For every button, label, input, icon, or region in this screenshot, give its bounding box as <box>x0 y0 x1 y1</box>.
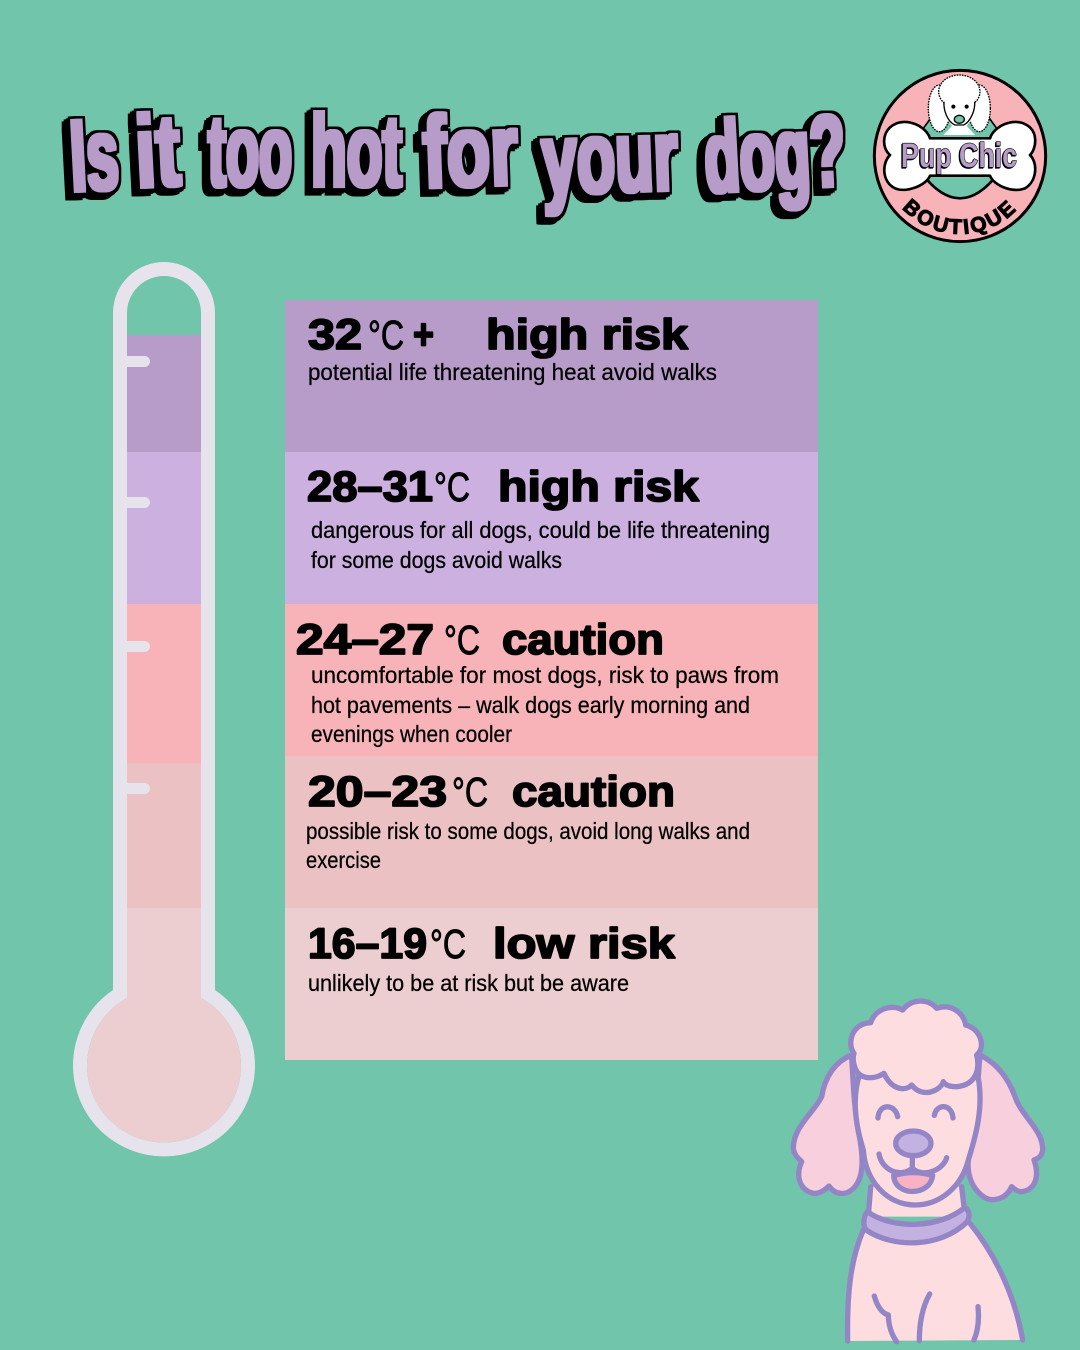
title: for <box>421 92 520 210</box>
panel: 28-31C high risk: high risk <box>498 463 699 511</box>
dog face <box>855 1057 980 1205</box>
thermometer level: 28-31C <box>127 452 201 604</box>
panel: 16-19C low risk: °C <box>430 921 466 967</box>
logo: Pup Chic Boutique badge <box>872 68 1048 244</box>
panel: 24-27C caution: hot pavements – walk dogs early morning and <box>311 692 750 718</box>
panel: 32C+ high risk: + <box>413 311 434 359</box>
panel: 24-27C caution: 24–27 <box>296 616 434 664</box>
title: too <box>208 94 292 208</box>
illustration: smiling poodle <box>793 1001 1043 1342</box>
panel: 24-27C caution: uncomfortable for most dogs, risk to paws from <box>311 662 779 688</box>
thermometer <box>73 262 255 1156</box>
panel: 20-23C caution: °C <box>452 769 488 815</box>
panel: 20-23C caution: exercise <box>306 847 381 873</box>
thermometer level: 20-23C <box>127 763 201 908</box>
panel: 32C+ high risk <box>285 300 818 452</box>
dog legs <box>874 1294 979 1342</box>
panel: 20-23C caution: caution <box>512 768 675 816</box>
dog body <box>848 1223 1023 1341</box>
thermometer tick marks <box>120 356 150 794</box>
title: Is <box>67 97 121 213</box>
title: dog? <box>701 93 848 215</box>
panel: 28-31C high risk: for some dogs avoid walks <box>311 547 562 573</box>
dog neck <box>867 1187 965 1217</box>
logo: Pup Chic Boutique badge: BOUTIQUE <box>902 198 1017 235</box>
panel: 24-27C caution: caution <box>502 616 664 664</box>
panel: 24-27C caution <box>285 604 818 756</box>
panel: 32C+ high risk: potential life threatening heat avoid walks <box>308 359 717 385</box>
dog collar <box>864 1207 969 1243</box>
title: it <box>132 93 183 209</box>
panel: 16-19C low risk: unlikely to be at risk but be aware <box>308 970 629 996</box>
panel: 28-31C high risk: dangerous for all dogs, could be life threatening <box>311 517 770 543</box>
panel: 28-31C high risk: °C <box>434 464 470 510</box>
panel: 32C+ high risk: 32 <box>308 311 362 359</box>
panel: 28-31C high risk <box>285 452 818 604</box>
thermometer level: 32C+ <box>127 335 201 452</box>
panel: 16-19C low risk: low risk <box>493 920 675 968</box>
logo poodle <box>928 75 990 135</box>
thermometer level: 24-27C <box>127 604 201 763</box>
dog right ear <box>968 1055 1043 1200</box>
title: hot <box>311 94 402 208</box>
panel: 20-23C caution <box>285 756 818 908</box>
dog left ear <box>793 1055 862 1193</box>
panel: 16-19C low risk <box>285 908 818 1060</box>
panel: 32C+ high risk: high risk <box>486 311 688 359</box>
panel: 24-27C caution: °C <box>444 617 480 663</box>
panel: 20-23C caution: possible risk to some dogs, avoid long walks and <box>306 818 750 844</box>
dog eyes <box>878 1107 953 1118</box>
thermometer level: 16-19C and bulb <box>87 908 241 1143</box>
logo bone <box>884 122 1035 190</box>
title: your <box>540 98 680 216</box>
panel: 20-23C caution: 20–23 <box>308 768 447 816</box>
dog head fluff <box>851 1001 981 1092</box>
panel: 32C+ high risk: °C <box>368 312 404 358</box>
panel: 16-19C low risk: 16–19 <box>308 920 427 968</box>
dog nose <box>896 1131 931 1156</box>
dog mouth and tongue <box>894 1173 933 1191</box>
panel: 24-27C caution: evenings when cooler <box>311 721 512 747</box>
logo: Pup Chic Boutique badge: Pup Chic <box>901 137 1017 175</box>
panel: 28-31C high risk: 28–31 <box>307 463 433 511</box>
title <box>67 92 848 216</box>
